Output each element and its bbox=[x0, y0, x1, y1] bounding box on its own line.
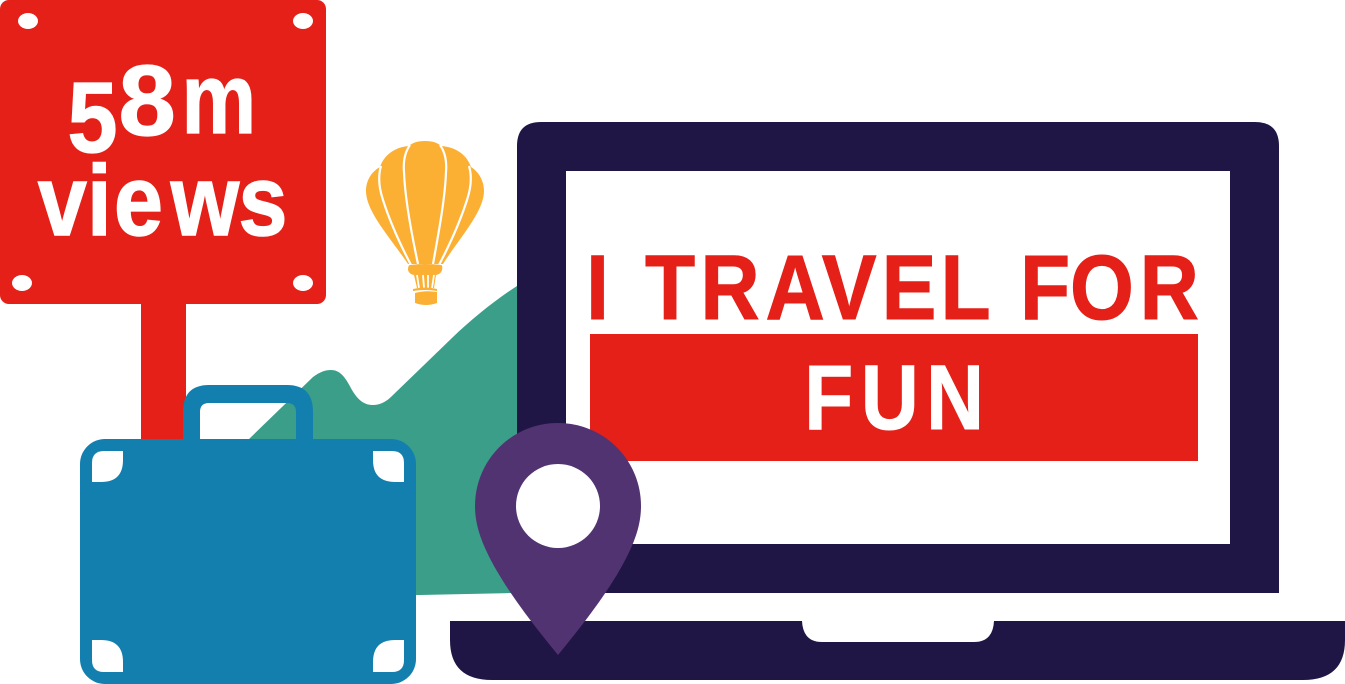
red banner bbox=[590, 334, 1198, 461]
mountain bbox=[249, 284, 560, 595]
banner text: fun: FUN bbox=[804, 347, 984, 449]
icon: location pin bbox=[475, 423, 641, 655]
sign screw holes bbox=[12, 13, 313, 291]
balloon basket bbox=[408, 264, 442, 288]
balloon envelope bbox=[366, 141, 484, 264]
suitcase body bbox=[80, 439, 416, 684]
sign text: views: views bbox=[38, 145, 287, 256]
laptop screen frame bbox=[517, 122, 1279, 593]
laptop bbox=[450, 122, 1345, 680]
suitcase corners bbox=[92, 451, 404, 672]
laptop screen bbox=[566, 171, 1230, 544]
suitcase handle bbox=[183, 385, 313, 445]
sign text: 58m: 5 bbox=[68, 63, 118, 174]
red sign board bbox=[0, 0, 326, 304]
sign text: 58m: m bbox=[181, 42, 256, 155]
sign post bbox=[141, 295, 186, 445]
pin hole bbox=[516, 464, 600, 548]
sign text: 58m bbox=[68, 42, 256, 174]
headline: I travel for: I TRAVEL FOR bbox=[586, 237, 1199, 339]
icon: hot air balloon bbox=[366, 141, 484, 305]
laptop base bbox=[450, 621, 1345, 680]
balloon ribs bbox=[379, 145, 471, 265]
sign text: 58m: 8 bbox=[118, 44, 176, 157]
icon: suitcase bbox=[80, 385, 416, 684]
